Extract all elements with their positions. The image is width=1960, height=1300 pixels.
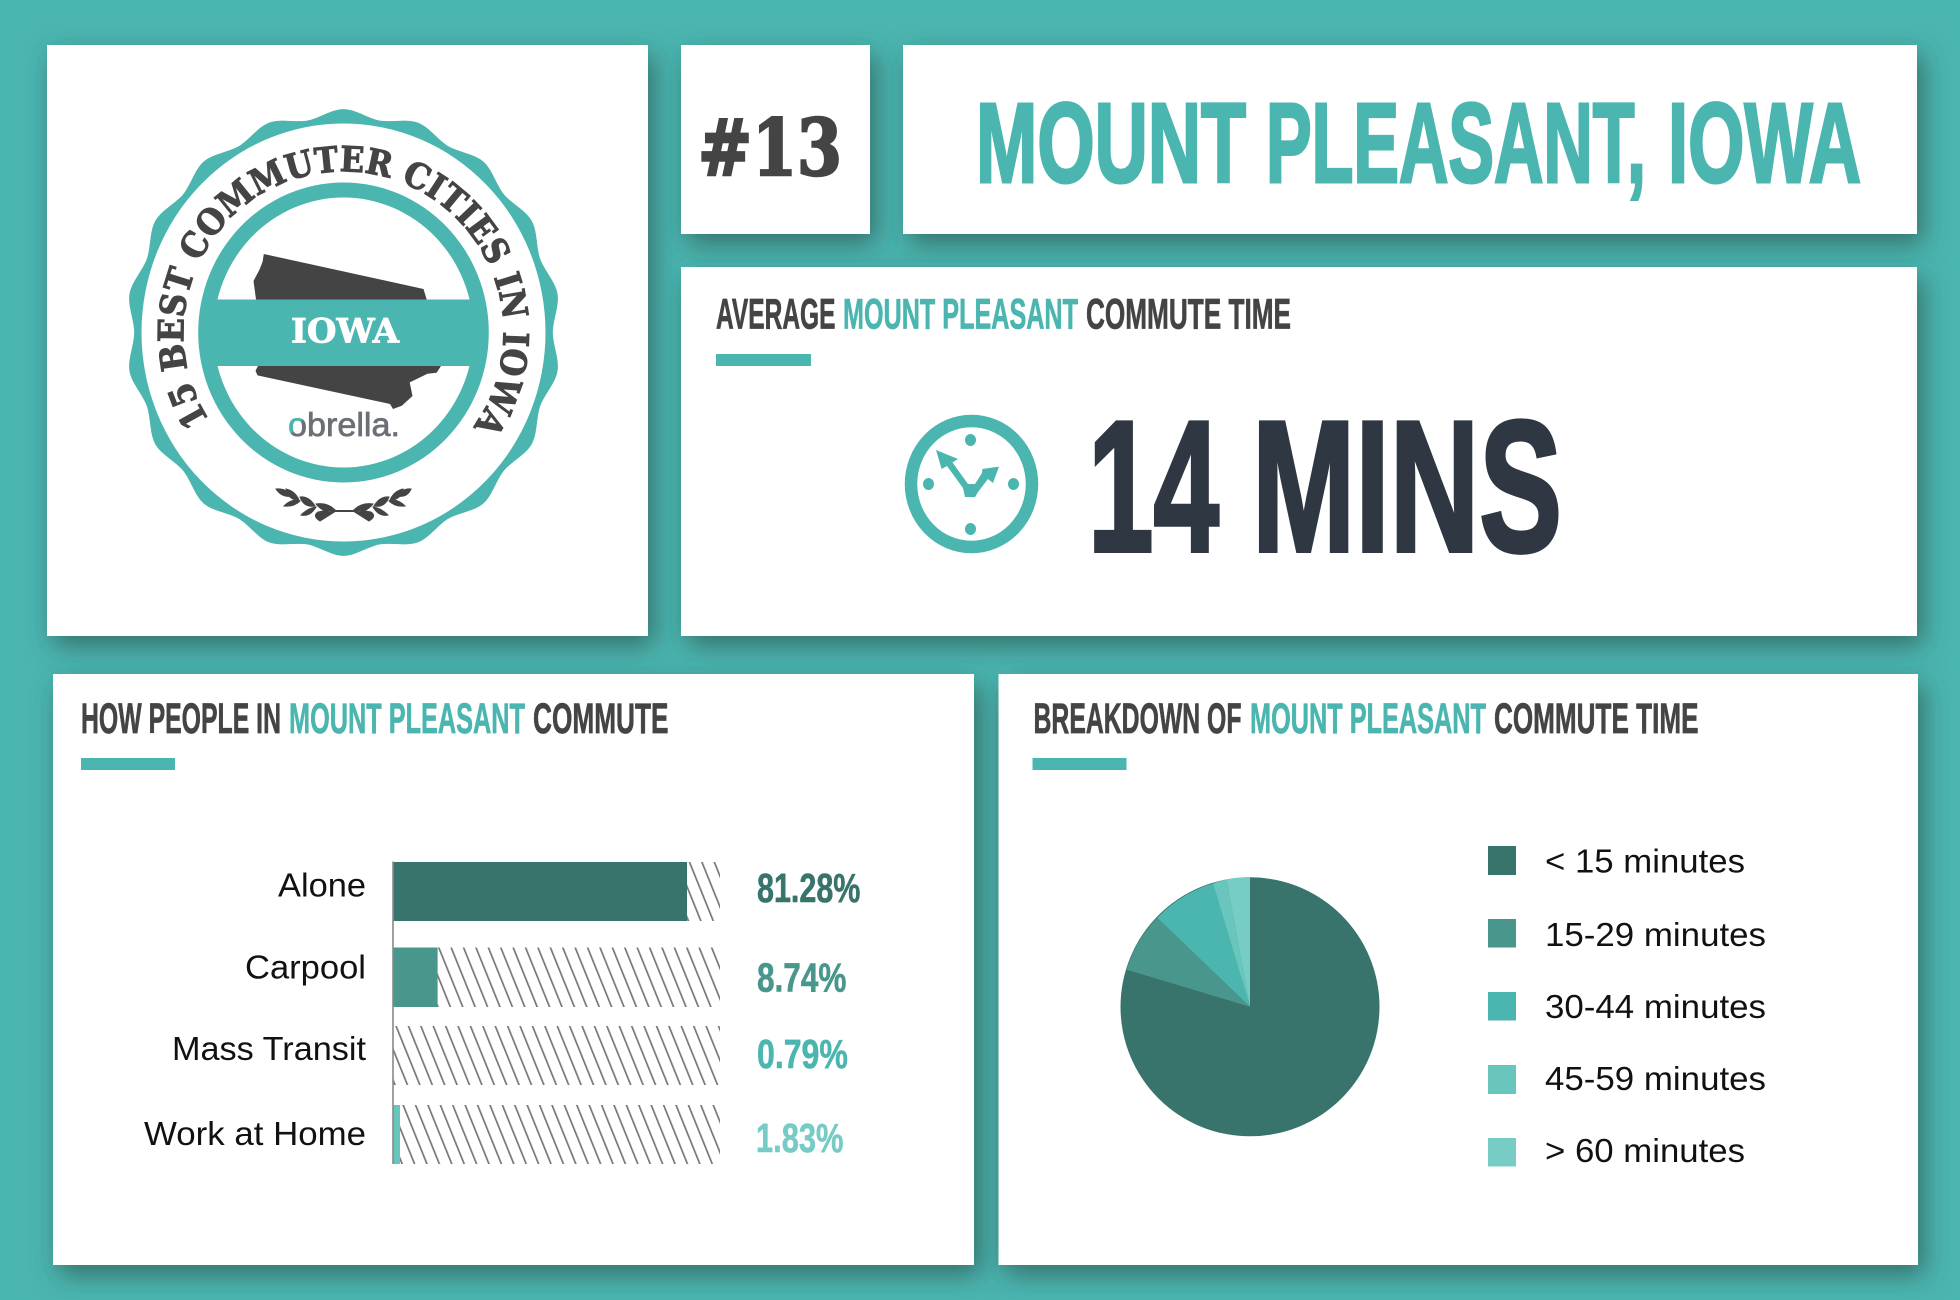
legend: 15-29 minutes <box>1545 916 1766 953</box>
badge: curved text: 15 BEST COMMUTER CITIES IN IOWA <box>157 145 530 432</box>
heading rule <box>716 354 811 366</box>
pie chart <box>1120 877 1380 1136</box>
big value: 14 mins <box>1088 382 1562 591</box>
title: MOUNT <box>976 80 1246 206</box>
big value: 14 mins: MINS <box>1252 382 1562 591</box>
heading: average commute: MOUNT PLEASANT <box>843 290 1078 338</box>
row: alone: 81.28% <box>757 865 860 911</box>
row: mass transit: 0.79% <box>757 1031 848 1077</box>
heading rule <box>1032 758 1126 770</box>
badge: teal ring <box>198 182 489 482</box>
row: work at home <box>144 1105 843 1164</box>
heading: breakdown: COMMUTE TIME <box>1494 695 1698 743</box>
heading: breakdown: BREAKDOWN OF <box>1034 695 1242 743</box>
row: work at home: 1.83% <box>756 1115 843 1161</box>
bar chart <box>144 862 860 1164</box>
row: carpool: Carpool <box>245 948 366 985</box>
heading: breakdown <box>1034 695 1698 743</box>
heading: how people commute: HOW PEOPLE IN <box>81 695 281 743</box>
legend: 45-59 minutes <box>1545 1060 1766 1097</box>
panel: badge <box>38 40 670 662</box>
icon: laurel <box>276 489 411 521</box>
badge: scalloped outer edge <box>123 109 564 556</box>
heading: how people commute: MOUNT PLEASANT <box>289 695 525 743</box>
legend: < 15 minutes <box>1545 843 1745 880</box>
icon: Iowa state silhouette <box>254 254 441 409</box>
heading: average commute: COMMUTE TIME <box>1086 290 1291 338</box>
panel: how people commute <box>53 674 974 1265</box>
badge: white inner disc <box>142 124 546 542</box>
panel: title <box>903 45 1917 234</box>
big value: 14 mins: 14 <box>1088 382 1219 591</box>
badge: band <box>205 300 482 366</box>
badge: IOWA label: IOWA <box>291 312 400 351</box>
panel: rank <box>681 45 870 234</box>
row: mass transit <box>172 1026 848 1085</box>
row: carpool: 8.74% <box>757 954 846 1000</box>
logo: obrella: obrella. <box>288 406 400 443</box>
row: alone <box>278 862 860 921</box>
legend: > 60 minutes <box>1545 1132 1745 1169</box>
heading: breakdown: MOUNT PLEASANT <box>1250 695 1486 743</box>
row: work at home: Work at Home <box>144 1115 366 1152</box>
heading: how people commute <box>81 695 668 743</box>
row: alone: Alone <box>278 866 366 904</box>
rank number: #13 <box>698 103 842 194</box>
badge: inner disc <box>214 198 474 468</box>
heading: how people commute: COMMUTE <box>533 695 668 743</box>
bar axis <box>392 862 394 1164</box>
title <box>976 80 1861 206</box>
heading: average commute <box>716 290 1291 338</box>
legend <box>1488 843 1766 1169</box>
panel: commute time breakdown <box>998 674 1918 1265</box>
row: carpool <box>245 948 846 1007</box>
icon: clock <box>911 421 1032 547</box>
heading: average commute: AVERAGE <box>716 290 836 338</box>
heading rule <box>81 758 175 770</box>
row: mass transit: Mass Transit <box>172 1030 366 1067</box>
legend: 30-44 minutes <box>1545 988 1766 1025</box>
panel: average commute time <box>681 267 1917 636</box>
title: PLEASANT, <box>1266 80 1646 206</box>
